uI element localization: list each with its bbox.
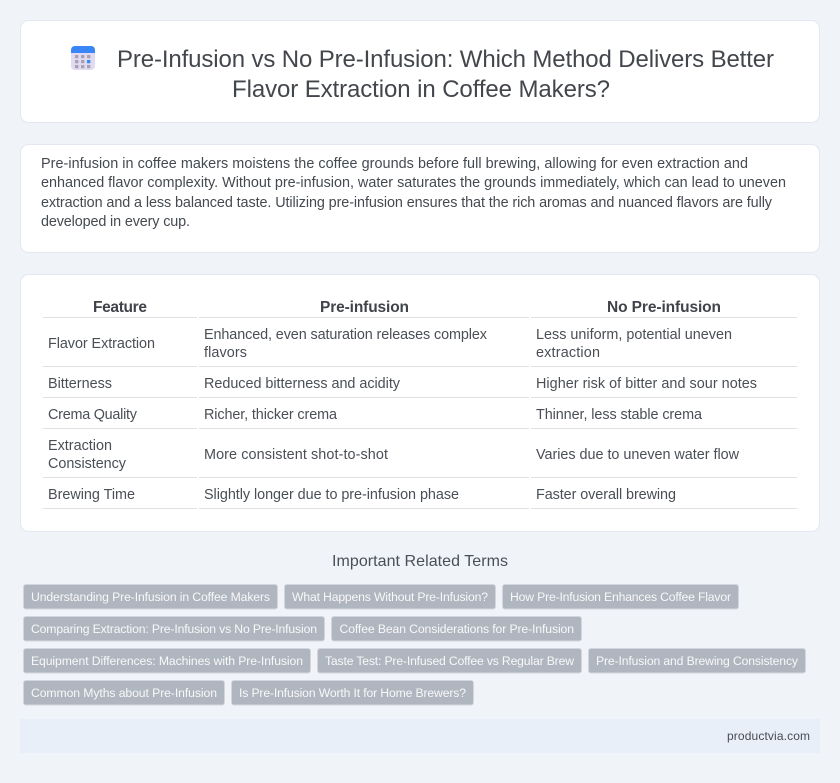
- tag: Is Pre-Infusion Worth It for Home Brewers?: [239, 686, 466, 700]
- row: flavor extraction: Less uniform, potential uneven: [536, 327, 732, 343]
- row: flavor extraction: extraction: [536, 345, 600, 361]
- related term tags: [24, 584, 806, 705]
- row: crema quality: [48, 407, 702, 423]
- tag: [232, 680, 474, 705]
- title: [117, 46, 774, 103]
- tag: [24, 616, 324, 641]
- tag: [318, 648, 582, 673]
- row: bitterness: Bitterness: [48, 376, 112, 392]
- tag: How Pre-Infusion Enhances Coffee Flavor: [510, 590, 731, 604]
- description text: enhanced flavor complexity. Without pre-infusion, water saturates the grounds immediately, which can lead to uneven: [41, 175, 786, 191]
- description text: Pre-infusion in coffee makers moistens the coffee grounds before full brewing, allowing for even extraction and: [41, 156, 748, 172]
- row: brewing time: Brewing Time: [48, 487, 135, 503]
- row: extraction consistency: Extraction: [48, 438, 112, 454]
- row: bitterness: Higher risk of bitter and sour notes: [536, 376, 757, 392]
- tag: [24, 680, 224, 705]
- row: flavor extraction: [48, 327, 732, 361]
- table header: Feature: [93, 299, 147, 316]
- tag: [588, 648, 806, 673]
- row: crema quality: Thinner, less stable crema: [536, 407, 702, 423]
- row: brewing time: [48, 487, 676, 503]
- footer source: productvia.com: [727, 729, 810, 743]
- tag: Coffee Bean Considerations for Pre-Infusion: [340, 622, 574, 636]
- tag: Common Myths about Pre-Infusion: [31, 686, 217, 700]
- heading: related terms: Important Related Terms: [332, 553, 508, 570]
- tag: Comparing Extraction: Pre-Infusion vs No Pre-Infusion: [31, 622, 317, 636]
- row: extraction consistency: Varies due to uneven water flow: [536, 447, 740, 463]
- tag: Equipment Differences: Machines with Pre-Infusion: [31, 654, 303, 668]
- tag: Understanding Pre-Infusion in Coffee Makers: [31, 590, 270, 604]
- panel: description: [20, 144, 820, 252]
- tag: Pre-Infusion and Brewing Consistency: [596, 654, 799, 668]
- row: flavor extraction: Enhanced, even saturation releases complex: [204, 327, 488, 343]
- row: bitterness: [48, 376, 757, 392]
- row: flavor extraction: Flavor Extraction: [48, 336, 155, 352]
- header card: [20, 20, 820, 122]
- row: crema quality: Richer, thicker crema: [204, 407, 337, 423]
- tag: [24, 584, 278, 609]
- table header: Pre-infusion: [320, 299, 409, 316]
- row: extraction consistency: [48, 438, 740, 472]
- description text: extraction and a less balanced taste. Utilizing pre-infusion ensures that the rich aromas and nuanced flavors are fully: [41, 195, 773, 211]
- tag: [332, 616, 582, 641]
- icon: calendar grid: [71, 46, 95, 70]
- tag: [502, 584, 738, 609]
- tag: What Happens Without Pre-Infusion?: [292, 590, 488, 604]
- footer: [20, 719, 820, 753]
- title: Pre-Infusion vs No Pre-Infusion: Which Method Delivers Better: [117, 46, 774, 73]
- title: Flavor Extraction in Coffee Makers?: [232, 76, 610, 103]
- row: brewing time: Slightly longer due to pre-infusion phase: [204, 487, 459, 503]
- tag: Taste Test: Pre-Infused Coffee vs Regular Brew: [325, 654, 574, 668]
- table header: [93, 299, 721, 316]
- table header: No Pre-infusion: [607, 299, 721, 316]
- row: bitterness: Reduced bitterness and acidity: [204, 376, 401, 392]
- row: brewing time: Faster overall brewing: [536, 487, 676, 503]
- row: extraction consistency: More consistent shot-to-shot: [204, 447, 388, 463]
- description text: [41, 156, 786, 230]
- row: flavor extraction: flavors: [204, 345, 247, 361]
- tag: [284, 584, 496, 609]
- description text: developed in every cup.: [41, 214, 190, 230]
- panel: comparison table: [20, 274, 820, 532]
- row: extraction consistency: Consistency: [48, 456, 127, 472]
- row: crema quality: Crema Quality: [48, 407, 138, 423]
- tag: [24, 648, 310, 673]
